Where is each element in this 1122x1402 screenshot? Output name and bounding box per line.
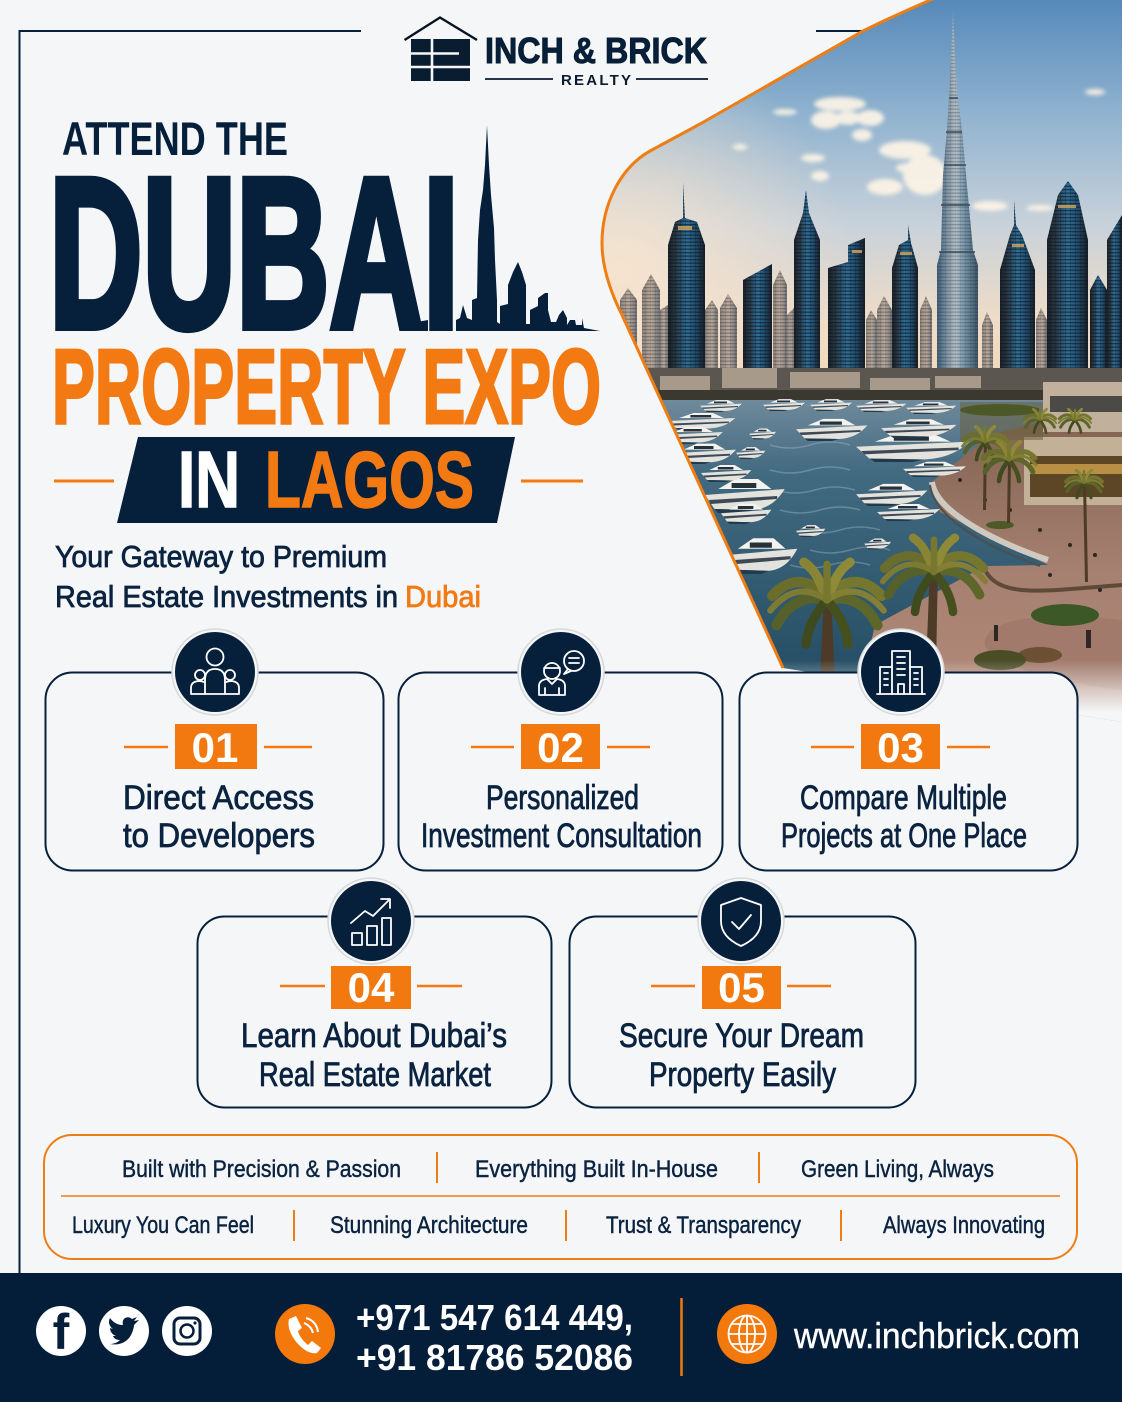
icon: consultant with speech bubble — [518, 629, 604, 715]
number 05 — [651, 964, 831, 1011]
label: Secure Your Dream — [619, 1017, 864, 1055]
hero photo: Dubai marina skyline — [600, 0, 1122, 742]
card 04: learn the market — [198, 878, 552, 1108]
heading: property expo: PROPERTY EXPO — [52, 328, 601, 446]
icon: twitter — [99, 1306, 149, 1356]
number 02: 02 — [537, 724, 584, 771]
tagline: REALTY — [561, 72, 631, 89]
top row values: Green Living, Always — [801, 1156, 994, 1183]
bottom row values: Luxury You Can Feel — [72, 1212, 254, 1239]
phone numbers: +971 547 614 449, — [356, 1297, 633, 1338]
label: Personalized — [486, 779, 639, 817]
number 01 — [124, 724, 312, 771]
promenade — [872, 421, 1122, 722]
card 03: compare projects — [740, 629, 1078, 870]
label: Learn About Dubai’s — [241, 1017, 507, 1055]
top row values: Built with Precision & Passion — [122, 1156, 401, 1183]
heading: attend the: ATTEND THE — [62, 112, 288, 165]
bottom row values: Always Innovating — [883, 1212, 1045, 1239]
footer bar — [0, 1273, 1122, 1402]
icon: phone — [275, 1304, 335, 1364]
number 01: 01 — [192, 724, 238, 771]
label: Investment Consultation — [421, 817, 702, 855]
icon: buildings — [858, 629, 944, 715]
icon: facebook: f — [53, 1304, 70, 1360]
phone numbers: +91 81786 52086 — [356, 1337, 633, 1378]
label: Property Easily — [649, 1056, 836, 1094]
top row values: Everything Built In-House — [475, 1156, 718, 1183]
label — [619, 1017, 864, 1094]
phone numbers — [356, 1297, 633, 1378]
boats — [668, 413, 735, 430]
icon: shield with check — [698, 878, 784, 964]
number 03 — [811, 724, 990, 771]
label: Real Estate Market — [259, 1056, 491, 1094]
card 02: personalized consultation — [398, 629, 722, 870]
water — [662, 400, 1048, 672]
number 03: 03 — [877, 724, 924, 771]
wordmark: INCH & BRICK — [485, 30, 707, 71]
card 05: secure your property — [570, 878, 916, 1108]
bottom row values — [72, 1212, 1045, 1239]
bottom row values: Trust & Transparency — [606, 1212, 801, 1239]
website: www.inchbrick.com — [793, 1315, 1080, 1356]
Burj Khalifa — [937, 12, 978, 375]
label — [781, 779, 1027, 855]
icon: facebook — [36, 1304, 86, 1360]
bottom row values: Stunning Architecture — [330, 1212, 528, 1239]
label — [421, 779, 702, 855]
waterfront buildings — [648, 368, 1122, 390]
icon: rising bar chart — [328, 878, 414, 964]
bottom fade — [780, 660, 1122, 712]
label: Compare Multiple — [800, 779, 1007, 817]
towers — [668, 181, 1122, 380]
subtitle: Your Gateway to Premium — [55, 539, 387, 574]
label: to Developers — [123, 817, 315, 855]
icon: house with bricks — [404, 18, 477, 81]
subtitle — [55, 539, 481, 614]
number 05: 05 — [718, 964, 765, 1011]
subtitle: Real Estate Investments in — [55, 579, 398, 614]
skyline silhouette — [411, 125, 600, 331]
heading: DUBAI: DUBAI — [49, 134, 459, 373]
number 02 — [471, 724, 650, 771]
top row values — [122, 1156, 994, 1183]
banner: in Lagos — [54, 435, 583, 524]
right-side mall — [1024, 437, 1122, 505]
label — [241, 1017, 507, 1094]
label: Direct Access — [123, 779, 314, 817]
icon: globe — [717, 1304, 777, 1364]
card 01: direct access — [46, 629, 384, 870]
values strip — [44, 1135, 1077, 1259]
subtitle: Dubai — [405, 579, 481, 614]
icon: instagram — [162, 1306, 212, 1356]
frame lines — [20, 31, 866, 1273]
label — [123, 779, 315, 855]
hazy towers — [620, 270, 1047, 372]
palms — [820, 440, 1088, 680]
number 04: 04 — [348, 964, 395, 1011]
label: Projects at One Place — [781, 817, 1027, 855]
banner: in Lagos: IN — [178, 435, 240, 524]
banner: in Lagos: LAGOS — [265, 435, 474, 524]
logo: Inch & Brick Realty — [404, 18, 708, 89]
number 04 — [280, 964, 462, 1011]
icon: group of people — [172, 629, 258, 715]
